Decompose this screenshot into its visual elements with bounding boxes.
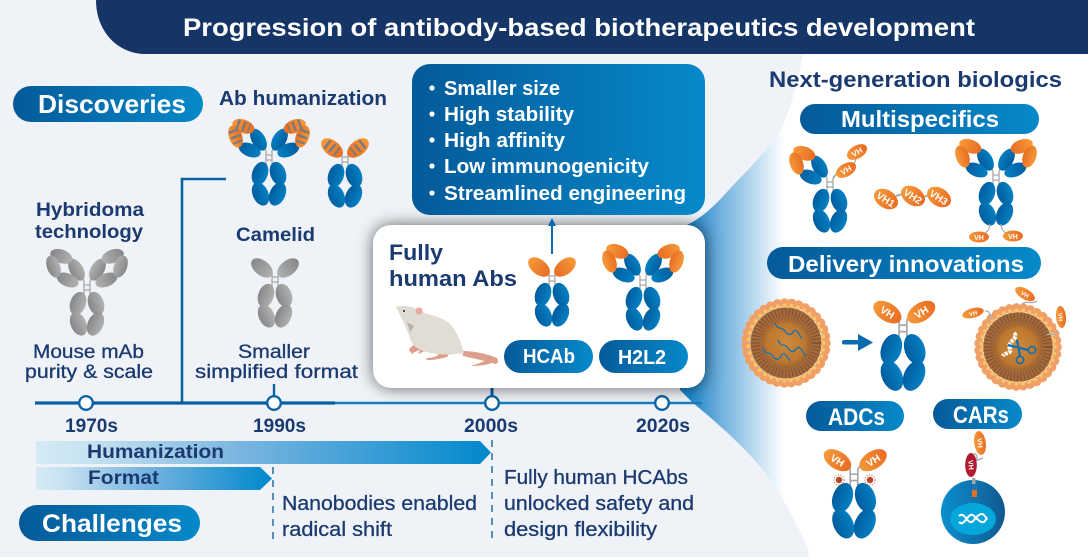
year labels: 1970s <box>65 416 118 437</box>
callout: fully human antibody benefits: Smaller size <box>444 78 560 100</box>
callout: fully human antibody benefits: Low immunogenicity <box>444 156 650 178</box>
H2L2 label: H2L2 <box>618 347 666 369</box>
icon: CAR T cell: VH <box>975 438 983 448</box>
challenge bar: Humanization <box>36 441 491 464</box>
shadow of fully human panel <box>373 225 705 388</box>
Discoveries badge <box>13 86 203 122</box>
icon: multispecific antibody with Fc-linked VH: VH <box>974 235 984 242</box>
icon: lipid nanoparticle with gene editor and VH ligands: VH <box>969 310 978 318</box>
challenge note: fully human HCAbs <box>504 467 694 541</box>
icon: CAR T cell <box>941 430 1005 544</box>
panel: fully human Abs: human Abs <box>389 266 517 291</box>
year labels: 1990s <box>253 416 306 437</box>
challenge bar: Format: Format <box>88 468 160 489</box>
icon: antibody-drug conjugate <box>820 445 891 542</box>
callout: fully human antibody benefits: High affinity <box>444 130 566 152</box>
panel: light timeline background <box>0 0 815 557</box>
icon: lipid nanoparticle with gene editor and VH ligands: VH <box>1019 291 1029 300</box>
icon: bispecific antibody with tandem VH: VH <box>839 164 853 177</box>
icon: CAR T cell: VH <box>966 460 974 470</box>
icon: trispecific VH1 VH2 VH3: VH2 <box>901 187 924 207</box>
ADCs badge: ADCs <box>828 404 885 431</box>
icon: multispecific antibody with Fc-linked VH: VH <box>1008 234 1018 241</box>
panel: fully human Abs: Fully <box>389 240 444 265</box>
discovery: Camelid: simplified format <box>195 362 359 383</box>
discovery: Hybridoma technology: technology <box>35 222 143 243</box>
Discoveries badge: Discoveries <box>38 89 186 119</box>
heading: Next-generation biologics: Next-generation biologics <box>769 67 1062 92</box>
marker 1990s <box>267 396 281 410</box>
CARs badge: CARs <box>953 402 1009 429</box>
icon: grey camelid antibody <box>248 254 302 330</box>
discovery: Hybridoma technology: Hybridoma <box>36 200 144 221</box>
discovery: Hybridoma technology: Mouse mAb <box>33 342 144 363</box>
challenge note: nanobodies: Nanobodies enabled <box>282 493 477 515</box>
title banner <box>96 0 1088 54</box>
title banner: Progression of antibody-based biotherapeutics development <box>183 14 976 42</box>
icon: VH antibody expressed from mRNA: VH <box>913 305 931 322</box>
icon: antibody-drug conjugate: VH <box>865 453 883 470</box>
marker 2000s <box>485 396 499 410</box>
icon: antibody-drug conjugate: VH <box>828 453 846 470</box>
icon: H2L2 antibody <box>599 241 687 333</box>
icon: humanized antibody with striped domains <box>225 116 313 208</box>
marker 1970s <box>79 396 93 410</box>
Delivery innovations badge <box>767 247 1041 279</box>
year labels <box>65 416 690 437</box>
discovery: Ab humanization <box>219 88 387 210</box>
arrow: nanoparticle to antibody <box>842 334 873 351</box>
callout: fully human antibody benefits: High stability <box>444 104 575 126</box>
Multispecifics badge: Multispecifics <box>841 106 999 132</box>
icon: multispecific antibody with Fc-linked VH <box>952 136 1040 242</box>
icon: grey mouse antibody <box>43 246 131 338</box>
discovery: Camelid: Smaller <box>238 342 311 363</box>
callout: fully human antibody benefits: Streamlined engineering <box>444 183 686 205</box>
Challenges badge: Challenges <box>42 510 182 538</box>
icon: lipid nanoparticle with gene editor and VH ligands <box>961 284 1067 386</box>
icon: lipid nanoparticle with mRNA <box>746 303 826 383</box>
icon: transgenic mouse <box>396 306 498 366</box>
Delivery innovations badge: Delivery innovations <box>788 251 1024 277</box>
challenge note: fully human HCAbs: design flexibility <box>504 519 657 541</box>
CARs badge <box>933 399 1022 429</box>
ADCs badge <box>806 401 904 431</box>
icon: bispecific antibody with tandem VH <box>786 141 870 235</box>
Challenges badge <box>19 505 200 541</box>
discovery: Hybridoma technology: purity & scale <box>25 362 153 383</box>
Multispecifics badge <box>800 104 1039 134</box>
marker 2020s <box>655 396 669 410</box>
icon: trispecific VH1 VH2 VH3: VH1 <box>874 190 897 210</box>
HCAb label: HCAb <box>523 346 575 368</box>
icon: VH antibody expressed from mRNA: VH <box>878 305 896 322</box>
discovery: Ab humanization: Ab humanization <box>219 88 387 110</box>
connector from timeline to Ab humanization <box>182 179 226 403</box>
year labels: 2000s <box>464 416 518 437</box>
arrow up to benefits <box>548 218 556 254</box>
icon: humanized heavy-chain antibody <box>318 134 372 210</box>
discovery: Camelid: Camelid <box>236 225 315 246</box>
HCAb label <box>504 340 593 373</box>
challenge note: nanobodies: radical shift <box>282 519 392 541</box>
discovery: Camelid <box>195 225 359 383</box>
icon: HCAb antibody <box>525 253 579 329</box>
panel: fully human Abs <box>373 218 705 388</box>
challenge note: fully human HCAbs: unlocked safety and <box>504 493 694 515</box>
challenge note: fully human HCAbs: Fully human HCAbs <box>504 467 688 489</box>
challenge note: nanobodies <box>282 493 477 541</box>
discovery: Hybridoma technology <box>25 200 153 383</box>
icon: trispecific VH1 VH2 VH3: VH3 <box>927 188 950 208</box>
challenge bar: Humanization: Humanization <box>87 442 224 463</box>
H2L2 label <box>599 340 688 373</box>
callout: fully human antibody benefits <box>412 64 705 215</box>
icon: bispecific antibody with tandem VH: VH <box>850 146 864 159</box>
blue fan linking timeline to next-generation biologics <box>676 100 790 557</box>
icon: VH antibody expressed from mRNA <box>869 296 939 394</box>
challenge bar: Format <box>36 467 272 490</box>
year labels: 2020s <box>636 416 690 437</box>
icon: trispecific VH1 VH2 VH3 <box>870 181 955 214</box>
timeline <box>35 384 702 437</box>
icon: lipid nanoparticle with gene editor and VH ligands: VH <box>1056 313 1063 322</box>
